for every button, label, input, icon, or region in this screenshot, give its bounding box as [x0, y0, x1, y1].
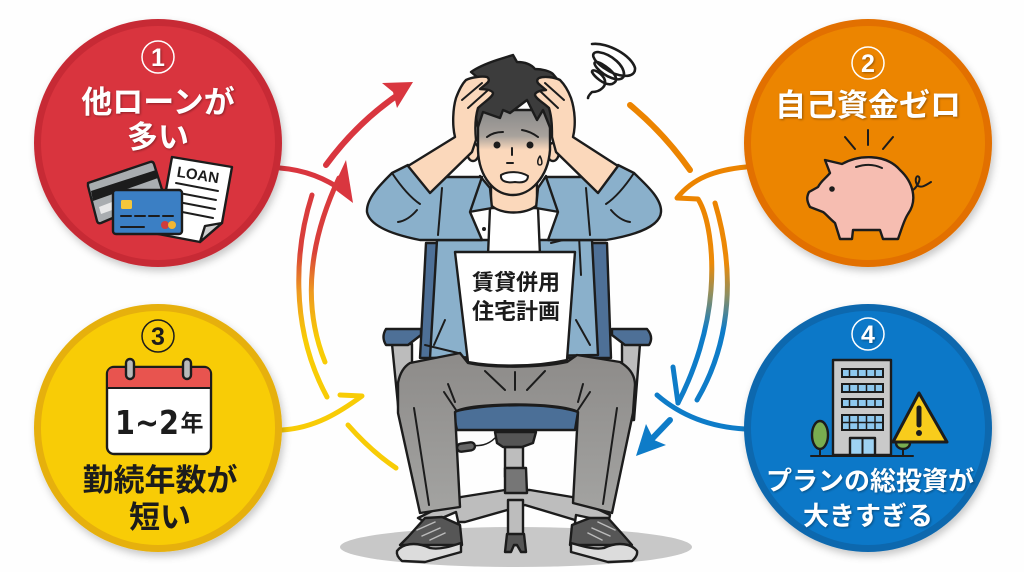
- number 2: [852, 47, 884, 79]
- icon: calendar: 1~2: [115, 403, 179, 442]
- paper: 賃貸併用: [472, 270, 560, 295]
- chair armrests: [384, 329, 651, 420]
- number 3: [142, 320, 174, 352]
- icon: piggy bank: [807, 130, 931, 239]
- number 4: [852, 318, 884, 350]
- heading 3: 短い: [129, 500, 191, 535]
- hands and forearms: [408, 77, 618, 193]
- chair seat: [453, 405, 578, 430]
- icon: cards and loan document: [88, 157, 232, 242]
- pants: [398, 353, 635, 513]
- number 2: 2: [861, 50, 875, 78]
- heading 2: 自己資金ゼロ: [775, 88, 961, 123]
- man: [367, 55, 661, 562]
- heading 4: プランの総投資が: [766, 466, 974, 496]
- circle 3: short tenure: [34, 304, 282, 552]
- circle 2: zero own funds: [744, 19, 992, 267]
- circle 1: other loans: [34, 19, 282, 267]
- arrows: right cycle: [630, 105, 746, 456]
- heading 1: [81, 85, 235, 155]
- circle 4: plan too large: [744, 304, 992, 552]
- number 1: [142, 41, 174, 73]
- icon: cards and loan document: LOAN: [176, 164, 220, 187]
- chair: [384, 243, 651, 552]
- hair: [471, 55, 567, 130]
- face: [467, 110, 559, 195]
- number 1: 1: [151, 44, 165, 72]
- sleeves: [367, 165, 661, 240]
- icon: calendar: [107, 359, 211, 454]
- icon: building and warning: [811, 360, 947, 456]
- heading 1: 多い: [127, 120, 189, 155]
- paper: 住宅計画: [472, 299, 560, 324]
- shadow under chair: [340, 527, 692, 567]
- heading 3: [82, 463, 238, 535]
- number 4: 4: [861, 321, 875, 349]
- chair back: [420, 243, 611, 358]
- heading 3: 勤続年数が: [82, 463, 238, 498]
- icon: calendar: 年: [180, 410, 204, 436]
- torso: [425, 176, 598, 358]
- heading 4: 大きすぎる: [803, 501, 933, 531]
- heading 4: [766, 466, 974, 531]
- heading 1: 他ローンが: [81, 85, 235, 120]
- number 3: 3: [151, 323, 165, 351]
- shoes: [397, 512, 637, 562]
- chair base: [418, 432, 610, 552]
- arrows: left cycle: [280, 82, 413, 468]
- paper: [455, 252, 575, 366]
- icon: dizzy swirl: [588, 44, 635, 98]
